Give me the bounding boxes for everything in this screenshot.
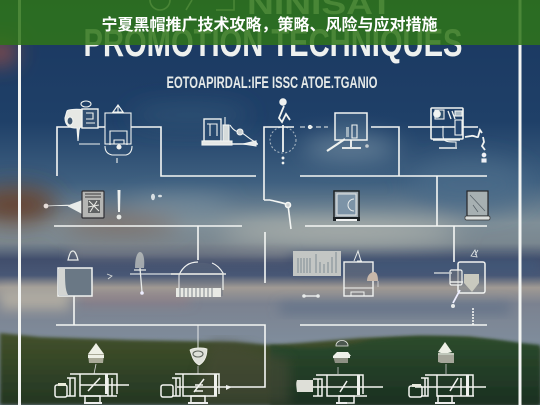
icon: control panel device [105,105,132,163]
icon: domed hopper [171,262,226,297]
machine D [409,375,486,403]
icon: round cap station B [190,348,207,374]
icon: monitor with pointer [327,113,369,151]
icon: chart panel [293,251,341,276]
icon: laptop [465,191,490,220]
icon: document with lead line [44,191,104,218]
machine C [296,375,383,403]
icon: container with hook [302,251,378,298]
icon: conical cap station A [88,343,104,374]
icon: hopper machine [434,250,485,308]
icon: tablet with arc [333,191,360,221]
icon: figure and globe [270,99,328,164]
title banner [0,0,540,45]
icon: pin marker [117,190,162,219]
subtitle: EOTOAPIRDAL:IFE ISSC ATOE.TGANIO [166,73,378,92]
machine B with arrow [161,374,232,403]
flowchart connector lines [54,127,487,387]
machine A [55,374,129,403]
icon: lamp post [107,252,146,295]
title text: 宁夏黑帽推广技术攻略，策略、风险与应对措施 [101,15,438,34]
icon: bent pipe [270,200,291,229]
icon: robot head with gauge [65,101,100,144]
icon: workstation [202,117,258,146]
icon: conical cap station D [438,342,454,374]
faded top icons [150,0,234,10]
icon: screen with bell [58,251,92,296]
icon: dome cap station C [333,340,351,374]
icon: dashboard screen and chair [431,108,486,162]
